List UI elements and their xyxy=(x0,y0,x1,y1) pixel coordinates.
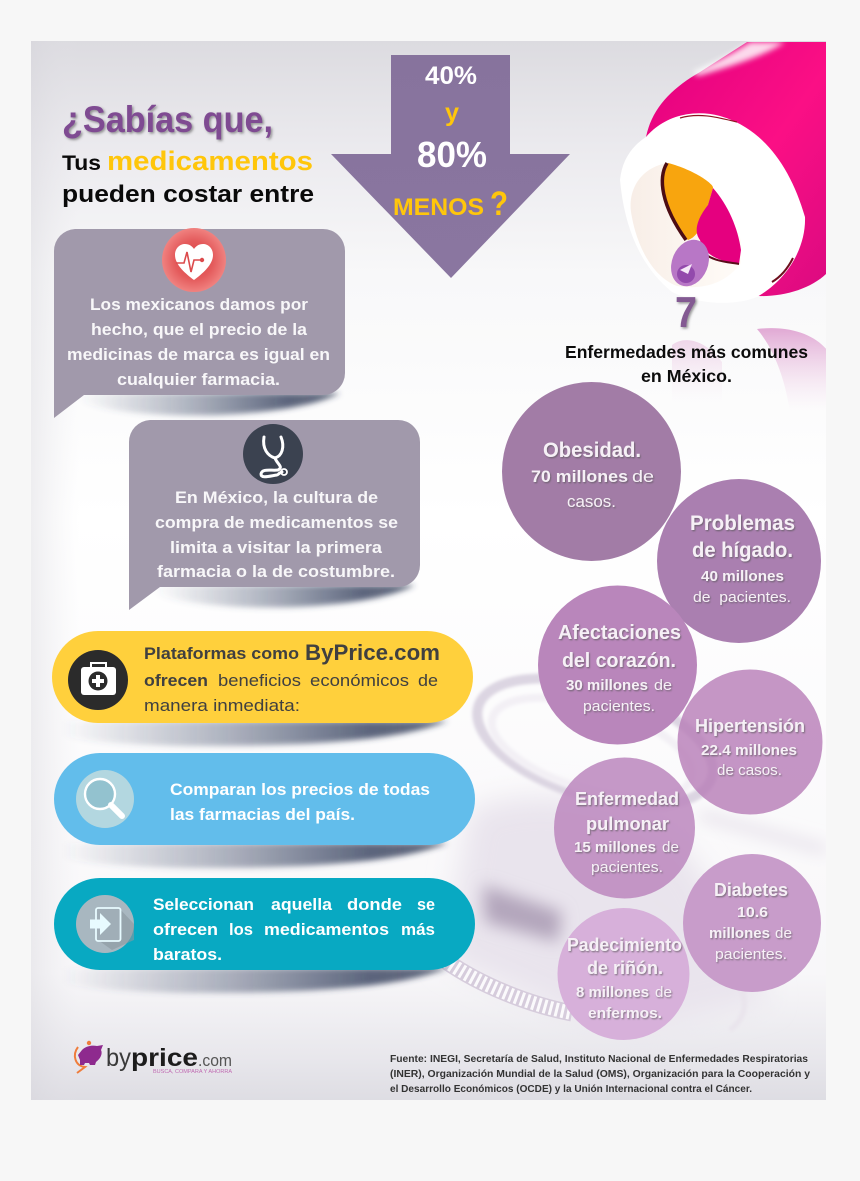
icon: enter door xyxy=(76,895,134,953)
teal pill: seleccionan xyxy=(54,878,475,993)
decorative bottle reflection xyxy=(672,328,826,396)
circle: problemas de higado: de pacientes. xyxy=(693,589,791,606)
circle: padecimiento de rinon: 8 millones xyxy=(576,984,649,1001)
bubble 1 text: medicinas de marca es igual en xyxy=(67,345,330,364)
teal pill text: baratos. xyxy=(153,945,222,964)
circle: enfermedad pulmonar: de xyxy=(662,839,679,856)
circle: diabetes: Diabetes xyxy=(714,880,788,900)
bottle opening xyxy=(631,163,741,287)
circle: obesidad: casos. xyxy=(567,492,616,511)
bubble 1 text: hecho, que el precio de la xyxy=(91,320,308,339)
teal pill text xyxy=(153,895,435,964)
circle: obesidad: de xyxy=(632,467,654,486)
circle: enfermedad pulmonar: pacientes. xyxy=(591,859,663,876)
arrow: 40% y 80% menos: 80% xyxy=(417,134,487,175)
arrow: 40% y 80% menos xyxy=(331,55,570,278)
yellow pill text: de xyxy=(418,671,438,690)
circle: hipertension: 22.4 millones xyxy=(701,742,797,759)
heading: 7 enfermedades: 7 xyxy=(675,288,697,337)
capsule xyxy=(671,240,709,286)
blue pill: comparan xyxy=(54,753,475,868)
bottle white lip xyxy=(620,113,805,303)
circle: padecimiento de rinon: de xyxy=(655,984,672,1001)
byprice logo: by xyxy=(106,1044,131,1072)
source note: Fuente: INEGI, Secretaría de Salud, Instituto Nacional de Enfermedades Respiratorias xyxy=(390,1053,808,1065)
pink pill bottle photo xyxy=(620,42,827,303)
yellow pill text: beneficios xyxy=(218,671,301,690)
circle: enfermedad pulmonar: pulmonar xyxy=(586,814,669,834)
yellow pill text: Plataformas como xyxy=(144,644,299,663)
heading: 7 enfermedades: en México. xyxy=(641,366,732,386)
teal pill text: los xyxy=(229,920,253,939)
yellow pill text: ByPrice.com xyxy=(305,640,440,665)
bubble 1 text: Los mexicanos damos por xyxy=(90,295,308,314)
title: ¿Sabías que, xyxy=(62,99,273,140)
bubble 2 text: En México, la cultura de xyxy=(175,488,378,507)
byprice logo: price xyxy=(131,1044,198,1072)
arrow: 40% y 80% menos: y xyxy=(445,99,459,127)
bubble 2 text: limita a visitar la primera xyxy=(170,538,383,557)
source note: el Desarrollo Económicos (OCDE) y la Unión Internacional contra el Cáncer. xyxy=(390,1083,752,1095)
circle: diabetes: de xyxy=(775,925,792,942)
circle: hipertension xyxy=(678,670,822,814)
title xyxy=(62,99,314,208)
title: medicamentos xyxy=(107,146,313,176)
circle: hipertension: Hipertensión xyxy=(695,716,805,736)
stethoscope background image xyxy=(445,654,826,1030)
yellow pill text: manera inmediata: xyxy=(144,696,300,715)
bubble 1 text: cualquier farmacia. xyxy=(117,370,280,389)
circle: obesidad xyxy=(502,382,681,561)
title: pueden costar entre xyxy=(62,181,314,208)
circle: diabetes xyxy=(683,854,821,992)
speech bubble 2 xyxy=(129,420,420,610)
yellow pill: plataformas xyxy=(52,631,473,746)
icon: first aid kit xyxy=(68,650,128,710)
source note xyxy=(390,1053,810,1095)
circle: hipertension: de casos. xyxy=(717,762,782,779)
byprice logo xyxy=(75,1041,232,1075)
circle: diabetes: 10.6 xyxy=(737,904,768,921)
blue pill text xyxy=(170,780,430,824)
bubble 2 text: farmacia o la de costumbre. xyxy=(157,562,395,581)
circle: afectaciones del corazon: pacientes. xyxy=(583,698,655,715)
circle: afectaciones del corazon: Afectaciones xyxy=(558,622,681,644)
blue pill text: las farmacias del país. xyxy=(170,805,355,824)
bubble 2 text: compra de medicamentos se xyxy=(155,513,398,532)
teal pill text: se xyxy=(417,895,435,914)
circle: enfermedad pulmonar: Enfermedad xyxy=(575,789,679,809)
orange interior xyxy=(663,163,713,240)
circle: afectaciones del corazon xyxy=(538,586,697,744)
yellow pill text xyxy=(144,640,440,715)
circle: problemas de higado: Problemas xyxy=(690,512,795,535)
circle: diabetes: pacientes. xyxy=(715,946,787,963)
speech bubble 1 xyxy=(54,228,345,418)
yellow pill text: económicos xyxy=(310,671,409,690)
circle: afectaciones del corazon: 30 millones xyxy=(566,677,648,694)
heading: 7 enfermedades: Enfermedades más comunes xyxy=(565,342,808,362)
yellow pill text: ofrecen xyxy=(144,671,208,690)
icon: magnifier xyxy=(76,770,134,828)
circle: padecimiento de rinon: de riñón. xyxy=(587,958,663,978)
circle: obesidad: 70 millones xyxy=(531,467,628,486)
teal pill text: aquella xyxy=(271,895,333,914)
icon: heart with pulse xyxy=(162,228,226,292)
arrow: 40% y 80% menos: MENOS xyxy=(393,194,484,221)
arrow: 40% y 80% menos: 40% xyxy=(425,62,477,90)
arrow: 40% y 80% menos: ? xyxy=(490,185,508,223)
heading: 7 enfermedades xyxy=(565,288,808,386)
circle: afectaciones del corazon: de xyxy=(654,677,672,694)
teal pill text: más xyxy=(401,920,435,939)
circle: problemas de higado: de hígado. xyxy=(692,539,793,562)
byprice logo: BUSCA, COMPARA Y AHORRA xyxy=(153,1069,232,1075)
circle: enfermedad pulmonar: 15 millones xyxy=(574,839,656,856)
circle: problemas de higado: 40 millones xyxy=(701,568,784,585)
circle: afectaciones del corazon: del corazón. xyxy=(562,650,676,672)
pink capsules inside xyxy=(697,188,741,264)
circle: padecimiento de rinon xyxy=(558,908,690,1040)
circle: padecimiento de rinon: Padecimiento xyxy=(567,935,682,955)
circle: problemas de higado xyxy=(657,479,821,643)
title: Tus xyxy=(62,152,101,175)
teal pill text: medicamentos xyxy=(264,920,389,939)
circle: enfermedad pulmonar xyxy=(554,758,695,898)
circle: obesidad: Obesidad. xyxy=(543,439,641,462)
bubble 2 text xyxy=(155,488,398,581)
teal pill text: Seleccionan xyxy=(153,895,254,914)
bubble 1 text xyxy=(67,295,330,389)
bottle body xyxy=(646,42,827,296)
byprice logo: .com xyxy=(198,1051,232,1070)
teal pill text: ofrecen xyxy=(153,920,218,939)
blue pill text: Comparan los precios de todas xyxy=(170,780,430,799)
icon: stethoscope xyxy=(243,424,303,484)
icon: piggy bank with magnifier xyxy=(75,1041,103,1073)
circle: diabetes: millones xyxy=(709,925,770,942)
teal pill text: donde xyxy=(347,895,402,914)
source note: (INER), Organización Mundial de la Salud (OMS), Organización para la Cooperación y xyxy=(390,1068,810,1080)
circle: padecimiento de rinon: enfermos. xyxy=(588,1005,662,1022)
